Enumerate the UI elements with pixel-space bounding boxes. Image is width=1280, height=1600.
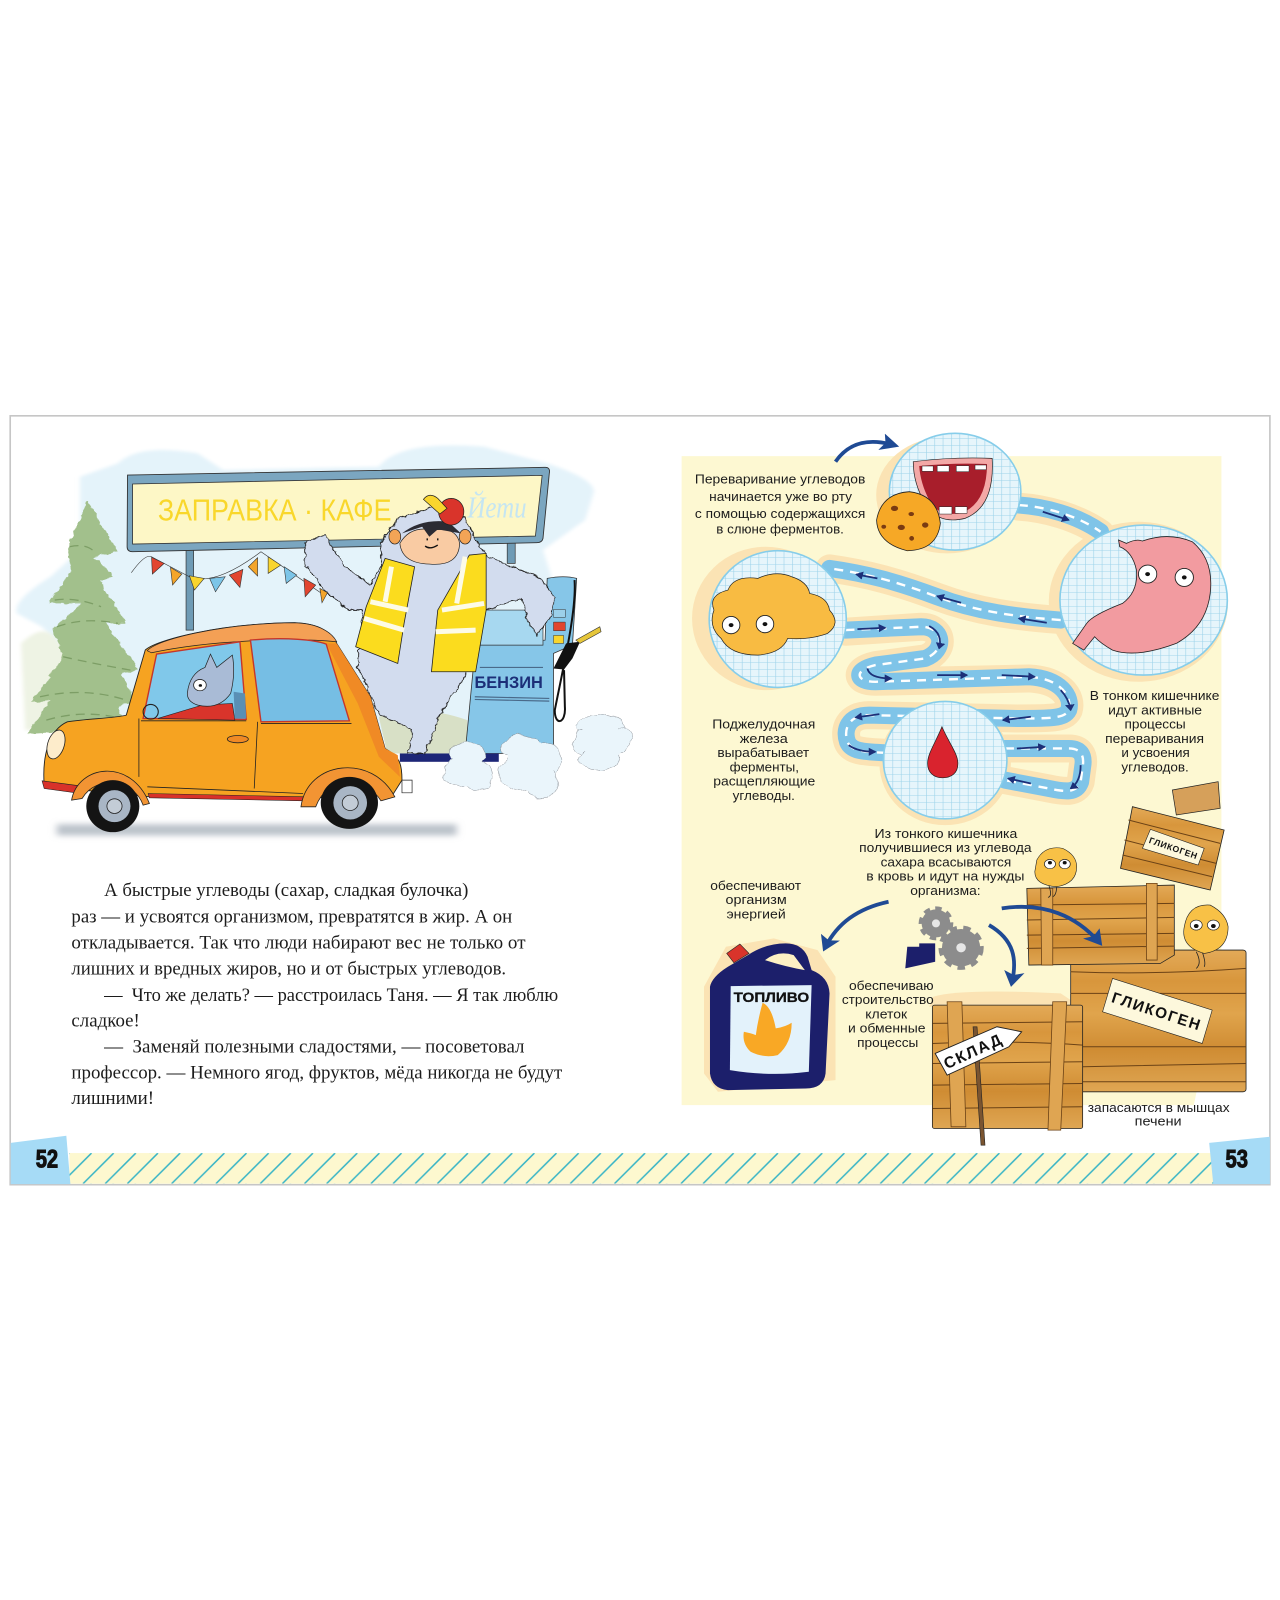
blood circle [883, 701, 1007, 819]
fuel hose [555, 580, 575, 721]
caption: storage: печени [1135, 1114, 1182, 1129]
pancreas eyes [722, 615, 774, 634]
cookie [877, 492, 940, 551]
car rear shading [326, 643, 400, 777]
caption: pancreas: железа [740, 731, 788, 746]
entry arrow [836, 442, 893, 462]
canister [704, 938, 836, 1092]
caption: mouth: Переваривание углеводов [695, 472, 865, 487]
flow arrows [849, 512, 1081, 788]
caption: pancreas: вырабатывает [717, 745, 809, 760]
vest stripes [364, 557, 484, 632]
body text: профессор. — Немного ягод, фруктов, мёда никогда не будут [71, 1063, 562, 1084]
caption: storage [1088, 1100, 1230, 1129]
yeti cap [439, 498, 464, 525]
page tab 53 [1209, 1137, 1270, 1184]
crate: top small lid [1172, 782, 1220, 815]
stomach circle [1060, 525, 1227, 675]
pancreas circle [709, 551, 846, 687]
car door lines [139, 718, 351, 793]
panel: digestion diagram background [682, 456, 1221, 1105]
circle halos [692, 437, 1228, 825]
caption: pancreas: ферменты, [730, 759, 799, 774]
body text: лишних и вредных жиров, но и от быстрых углеводов. [71, 958, 506, 979]
caption: energy: организм [726, 892, 787, 907]
small glycogen label [1142, 829, 1204, 865]
bunting flags [131, 552, 327, 603]
yeti eyes and mouth [425, 538, 438, 548]
warehouse sign label: СКЛАД [941, 1031, 1006, 1073]
mouth circle [889, 433, 1021, 550]
caption: small intestine: В тонком кишечнике [1090, 688, 1219, 703]
sky wash [16, 445, 594, 743]
front wheel arch [301, 768, 395, 807]
caption: building: обеспечиваю [849, 978, 934, 993]
crate: top glycogen box [1121, 807, 1224, 890]
body text: раз — и усвоятся организмом, превратятся в жир. А он [71, 906, 512, 927]
caption: small intestine: углеводов. [1121, 759, 1189, 774]
crate halo [929, 992, 1081, 1007]
cap visor [423, 495, 447, 514]
grass tuft [379, 711, 467, 753]
yeti ears [389, 529, 401, 544]
cat seat [234, 692, 246, 718]
caption: blood: организма: [910, 883, 981, 898]
body text: А быстрые углеводы (сахар, сладкая булочка) [104, 880, 468, 901]
arrow to building [989, 925, 1014, 982]
character on back crate [1184, 905, 1228, 968]
caption: small intestine: переваривания [1105, 731, 1204, 746]
stomach eyes [1138, 565, 1193, 586]
caption: blood: получившиеся из углевода [859, 840, 1032, 855]
big glycogen label [1103, 978, 1212, 1043]
body text: — Что же делать? — расстроилась Таня. — Я так люблю [103, 985, 558, 1006]
orange halos [830, 507, 1101, 791]
brick [905, 943, 935, 968]
sign panel [133, 475, 542, 544]
small gear [922, 909, 950, 937]
large gear [942, 929, 980, 966]
body text: — Заменяй полезными сладостями, — посоветовал [103, 1037, 524, 1058]
caption: pancreas [712, 717, 815, 803]
cat pupil [199, 684, 202, 687]
canister halo [704, 938, 836, 1092]
character on middle crate [1035, 848, 1077, 897]
fuel label: ТОПЛИВО [734, 990, 809, 1005]
exhaust cloud large [572, 714, 632, 770]
red sill [42, 781, 305, 801]
rear wheel [86, 780, 139, 832]
caption: building: клеток [865, 1006, 907, 1021]
canister label [730, 985, 812, 1074]
caption: small intestine: идут активные [1108, 702, 1202, 717]
nozzle [554, 642, 580, 669]
mouth cavity [919, 464, 987, 514]
intestine tube [830, 505, 1101, 791]
stomach organ [1073, 537, 1211, 653]
fir tree [27, 500, 140, 734]
headlamp [44, 729, 68, 760]
canister body [710, 943, 830, 1090]
tube centre dashes [830, 505, 1101, 791]
sign board [127, 467, 550, 552]
caption: mouth: в слюне ферментов. [716, 522, 844, 537]
arrow to energy [826, 902, 889, 947]
caption: small intestine: и усвоения [1121, 745, 1190, 760]
sign poles [186, 542, 515, 630]
cat driver [143, 654, 246, 720]
caption: mouth: начинается уже во рту [709, 489, 852, 504]
yeti vest left [356, 558, 415, 663]
caption: pancreas: расщепляющие [713, 774, 815, 789]
cat eye [194, 679, 206, 691]
pump buttons [554, 609, 565, 643]
pump rules [475, 667, 549, 701]
fuel drop arrow [743, 1003, 792, 1056]
cat jacket [158, 703, 235, 720]
exhaust cloud small [442, 742, 492, 790]
front window [143, 642, 246, 719]
body text [71, 880, 562, 1109]
rear wheel arch [72, 771, 149, 805]
exhaust cloud middle [499, 733, 562, 798]
crate: back large [1071, 950, 1246, 1092]
caption: mouth: с помощью содержащихся [695, 506, 865, 521]
pump label: БЕНЗИН [474, 673, 543, 692]
caption: mouth [695, 472, 865, 537]
book spread frame [10, 416, 1270, 1185]
gears and brick [905, 909, 980, 968]
caption: storage: запасаются в мышцах [1088, 1100, 1230, 1115]
cat head [187, 654, 234, 706]
blood drop [928, 727, 958, 778]
car body [44, 623, 402, 798]
big glycogen text: ГЛИКОГЕН [1109, 990, 1204, 1035]
pump body [465, 577, 577, 753]
road shadow [57, 824, 457, 836]
sign post [973, 1027, 985, 1145]
caption: pancreas: Поджелудочная [712, 717, 815, 732]
caption: blood [859, 826, 1032, 898]
caption: energy: обеспечивают [710, 878, 801, 893]
yeti attendant [305, 495, 555, 753]
lower diagram illustrations [704, 782, 1246, 1145]
car roof [147, 623, 337, 653]
yeti vest right [431, 553, 486, 672]
fuel pump [465, 577, 601, 753]
body text: лишними! [71, 1088, 154, 1109]
crate: front warehouse [932, 1002, 1083, 1130]
body text: сладкое! [71, 1011, 140, 1032]
page tab 52: 52 [36, 1145, 58, 1173]
forecourt strip [400, 753, 499, 762]
small glycogen text: ГЛИКОГЕН [1148, 835, 1199, 861]
sign lettering: yeti: Йети [467, 489, 527, 524]
nozzle spout [576, 627, 601, 643]
caption: small intestine: процессы [1124, 717, 1186, 732]
caption: building: и обменные [848, 1021, 926, 1036]
digestion pathway [692, 433, 1228, 825]
body text: откладывается. Так что люди набирают вес не только от [71, 932, 526, 953]
door handle [227, 735, 248, 743]
licence plate [402, 780, 412, 793]
warehouse sign [935, 1027, 1022, 1075]
caption: blood: Из тонкого кишечника [874, 826, 1018, 841]
caption: blood: в кровь и идут на нужды [866, 869, 1024, 884]
caption: pancreas: углеводы. [733, 788, 795, 803]
sign lettering: ЗАПРАВКА · КАФЕ [158, 493, 392, 527]
caption: building: процессы [857, 1035, 918, 1050]
illustration: gas station with car [16, 445, 632, 836]
page tab 52 [11, 1136, 70, 1184]
front wheel [321, 777, 378, 829]
orange car [42, 623, 412, 832]
crate: middle [1027, 883, 1174, 965]
canister cap [727, 944, 749, 963]
yeti fur body [305, 505, 555, 753]
caption: energy: энергией [727, 906, 786, 921]
caption: blood: сахара всасываются [881, 854, 1011, 869]
caption: small intestine [1090, 688, 1219, 774]
teeth [922, 465, 986, 514]
steering wheel [143, 704, 158, 719]
caption: building: строительство [842, 992, 934, 1007]
mouth lips [913, 458, 992, 520]
caption: energy [710, 878, 801, 921]
caption: building [842, 978, 934, 1050]
pancreas organ [712, 574, 835, 655]
rear window [250, 639, 349, 722]
yeti hair [402, 521, 461, 537]
pump upper panel [476, 610, 543, 645]
footer stripe band [69, 1153, 1214, 1184]
page tab 53: 53 [1226, 1145, 1248, 1173]
yeti face [400, 529, 460, 564]
canister handle hole [765, 953, 805, 970]
arrow to storage [1002, 907, 1099, 942]
pale foliage [21, 631, 126, 730]
